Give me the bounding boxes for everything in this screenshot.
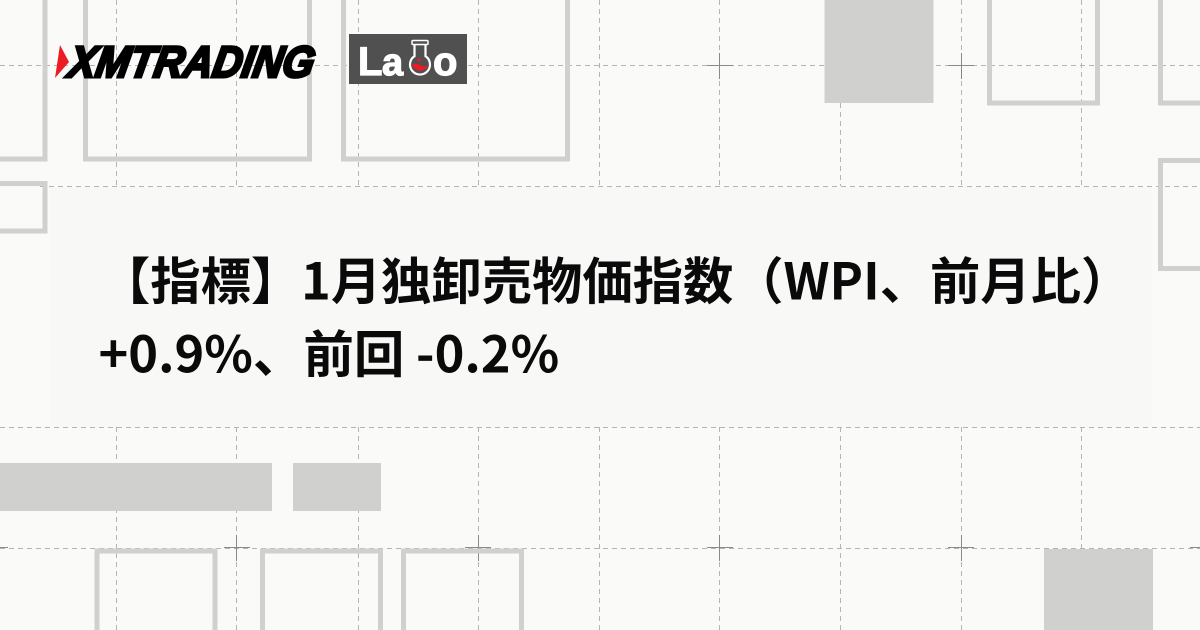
logo: Labo: o [433,40,457,84]
logo: Labo: a [382,42,404,84]
title: 【指標】1月独卸売物価指数（WPI、前月比） [100,242,1131,314]
logo: XMTRADING: XMTRADING [63,38,319,87]
logo: Labo [349,34,467,84]
title: +0.9%、前回 -0.2% [98,314,559,388]
logo: Labo: L [358,40,382,84]
title [98,242,1131,388]
icon: flask [410,40,430,75]
title panel [50,187,1152,427]
